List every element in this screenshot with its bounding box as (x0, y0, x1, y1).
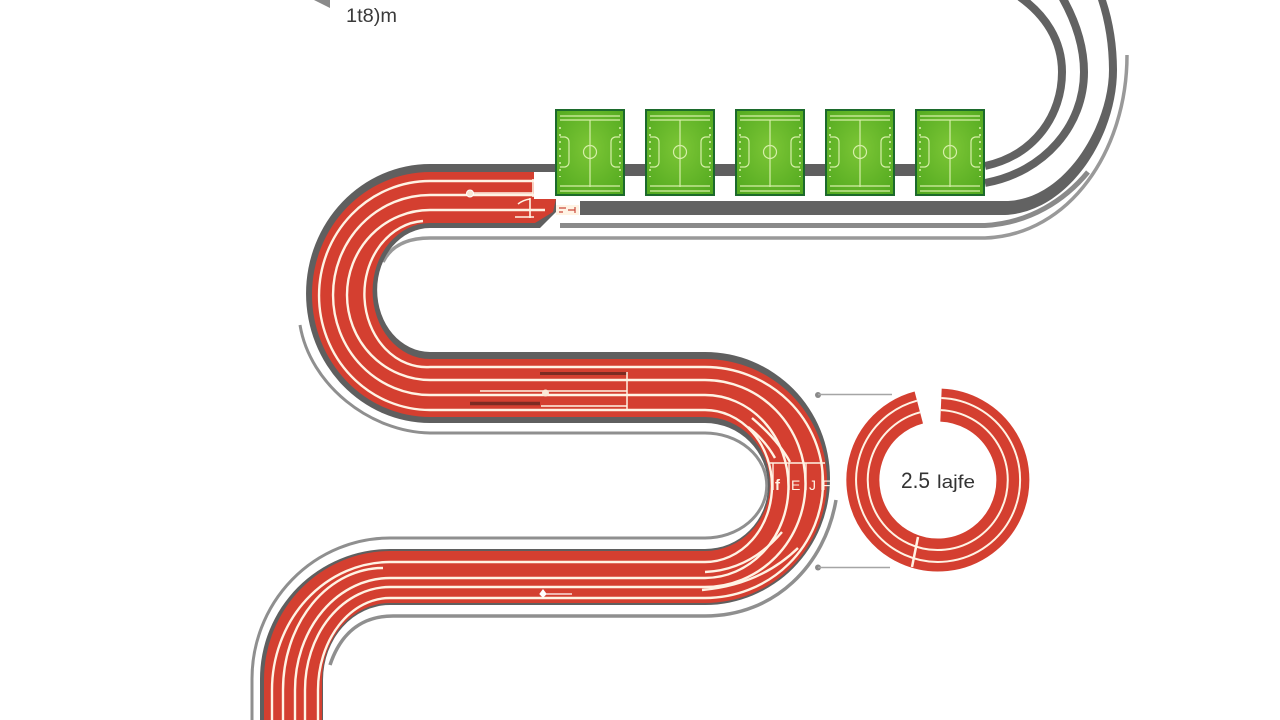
lower callout line (815, 564, 890, 570)
mid straight markings (470, 372, 627, 410)
ring label: 2.5 (901, 468, 930, 493)
football pitch 5 (916, 110, 984, 195)
lane number markings on the bend: f (775, 477, 781, 494)
lower straight marker (540, 590, 572, 597)
start line markings (466, 179, 579, 218)
lap ring (856, 398, 1020, 567)
grey connector bars between pitches (625, 164, 915, 176)
white lane lines (272, 181, 823, 720)
lane number markings on the bend: E (791, 477, 800, 493)
top-left corner wedge (314, 0, 330, 8)
lane number markings on the bend (770, 463, 831, 494)
red running surface (264, 172, 827, 720)
upper right grey curved lanes (580, 0, 1117, 215)
grey track base (260, 164, 830, 720)
ring label unit: lajfe (937, 472, 975, 492)
thin outer track edge lines (252, 55, 1127, 720)
lane number markings on the bend: J (809, 477, 816, 493)
distance label: 1t8)m (346, 6, 397, 27)
football pitch 4 (826, 110, 894, 195)
football pitch 3 (736, 110, 804, 195)
lane number markings on the bend: F (822, 477, 831, 493)
football pitch 1 (556, 110, 624, 195)
upper callout line (815, 392, 892, 398)
football pitch 2 (646, 110, 714, 195)
